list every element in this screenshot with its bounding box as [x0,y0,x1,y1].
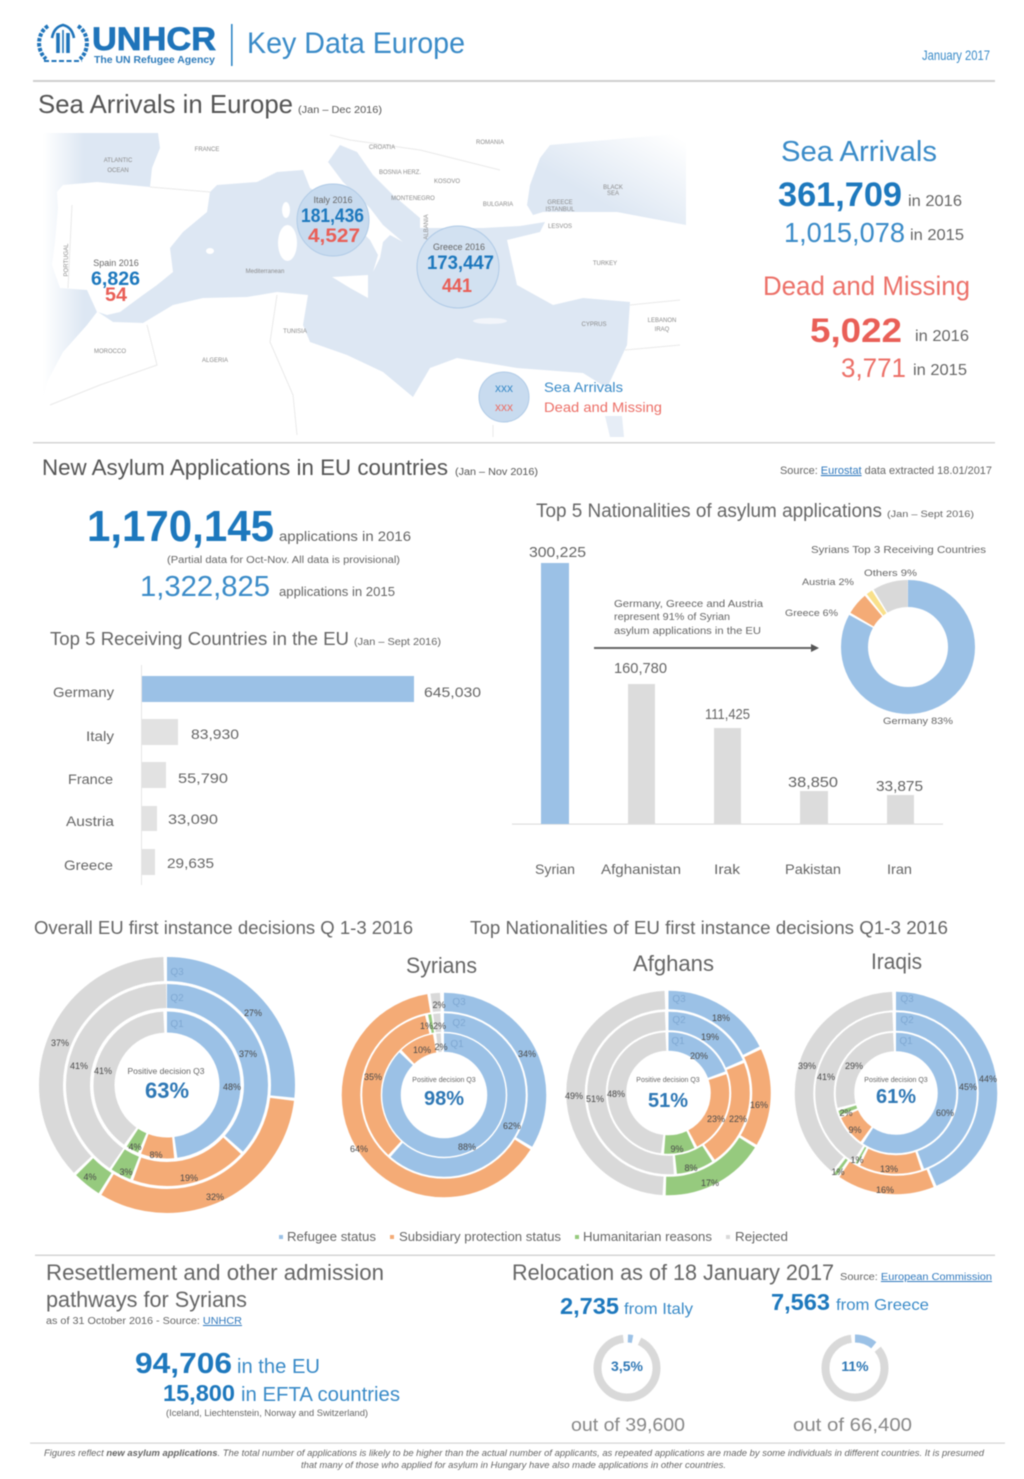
ring labels: 32% [206,1192,224,1202]
ring labels: Q3 [900,994,914,1005]
Italy and islands [206,162,507,324]
map place labels: LEBANON [648,318,676,324]
annotation: Germany, Greece and Austria: asylum applications in the EU [614,626,761,637]
ring labels: Q2 [672,1015,686,1026]
ring labels: 60% [936,1108,954,1118]
donut: Syrians top 3 receiving countries: Others 9% [864,568,918,579]
source: UNHCR: as of 31 October 2016 - Source: UNHCR [46,1316,242,1327]
ring labels: Q3 [170,967,184,978]
figure: Greece: from Greece [836,1297,929,1314]
centre value: Positive decision Q3 [864,1077,928,1084]
bars [142,676,414,875]
header logo: UNHCR [39,21,216,66]
figure: Greece: 7,563 [771,1289,830,1315]
figure: Italy: from Italy [624,1301,693,1318]
ring labels: 3% [119,1167,133,1177]
map place labels: Mediterranean [246,269,284,275]
donut: Greece relocation: 11% [841,1358,869,1374]
ring labels [798,994,997,1195]
applications totals: 1,322,825 [140,571,270,603]
arrivals 2016: in 2016 [908,193,962,210]
ring labels: 37% [239,1049,257,1059]
map base [43,133,686,437]
callout: Spain: 54 [105,285,127,306]
ring labels: 62% [503,1121,521,1131]
map place labels: BOSNIA HERZ. [379,170,421,176]
map place labels: CYPRUS [581,322,607,328]
legend: decision types: Subsidiary protection status [399,1229,561,1244]
ring labels: 45% [959,1082,977,1092]
map place labels: TURKEY [593,261,617,267]
values: 111,425 [705,706,750,723]
values: 83,930 [191,726,239,742]
ring labels: Q2 [900,1015,914,1026]
heading: Sea Arrivals in Europe: Sea Arrivals in Europe [38,89,293,119]
values: 160,780 [614,660,667,677]
values: 55,790 [178,770,228,786]
donut: Iraqis [798,994,997,1195]
ring labels: 18% [712,1013,730,1023]
ring labels: 37% [51,1038,69,1048]
donut: Syrians top 3 receiving countries: Germany 83% [883,716,954,727]
centre value: Positive decision Q3 [127,1066,205,1076]
ring labels: Q2 [170,993,184,1004]
dead 2016 [810,312,969,350]
ring labels: 13% [880,1164,898,1174]
legend: decision types [279,1229,788,1244]
ring labels: 41% [94,1066,112,1076]
map place labels: FRANCE [195,147,219,153]
ring labels [51,967,262,1202]
country labels: Italy [86,728,114,744]
ring labels: 88% [458,1142,476,1152]
nationality labels: Syrian [535,861,575,877]
map place labels: OCEAN [107,168,129,174]
ring labels: 17% [701,1178,719,1188]
ring labels: 9% [848,1125,862,1135]
donut: Afghans [565,994,768,1188]
map legend: xxx [495,381,513,395]
ring labels: 8% [149,1150,163,1160]
centre value: 98% [424,1088,464,1110]
heading: Overall EU first instance decisions: Overall EU first instance decisions Q 1-3 2016 [34,918,413,938]
applications totals: 1,170,145 [87,502,274,551]
callout: Spain: Spain 2016 [93,258,139,268]
donut: Greece relocation [826,1338,884,1398]
values: 33,090 [168,811,218,827]
map place labels: ALBANIA [424,214,430,240]
country labels: Greece [64,857,113,873]
arrivals 2016 [778,176,962,214]
donut: Italy relocation [598,1338,656,1398]
values [529,544,923,795]
ring labels [565,994,768,1188]
heading: Dead and Missing: Dead and Missing [763,271,970,301]
heading: Top 5 Receiving Countries: (Jan – Sept 2016) [354,637,441,648]
bars [541,563,914,824]
ring labels: 19% [701,1032,719,1042]
centre value: Positive decision Q3 [636,1077,700,1084]
ring labels: 8% [684,1163,698,1173]
ring labels [350,997,536,1154]
heading: Resettlement: Resettlement and other admission [46,1260,384,1285]
figure: Italy [560,1293,693,1319]
values: 29,635 [167,855,214,871]
callout: Greece: 173,447 [427,253,494,274]
heading: Top 5 Nationalities: (Jan – Sept 2016) [887,509,974,519]
heading: Iraqis: Iraqis [871,949,922,974]
bar chart: receiving countries [53,665,481,885]
ring labels: 35% [364,1072,382,1082]
map place labels: CROATIA [369,145,395,151]
ring labels: 4% [83,1172,97,1182]
figure: EU [135,1348,320,1380]
map place labels: KOSOVO [434,179,460,185]
nationality labels [535,861,912,877]
footnote: that many of those who applied for asylum in Hungary have also made applications in other countries. [301,1460,726,1471]
country labels: France [68,771,113,787]
annotation: Germany, Greece and Austria: represent 91% of Syrian [614,612,730,623]
country labels: Germany [53,684,114,700]
map legend: Sea Arrivals [544,379,623,395]
map place labels: PORTUGAL [64,243,70,276]
ring labels: 2% [434,1042,448,1052]
totals: out of 39,600 [571,1415,685,1435]
centre value [864,1077,928,1108]
country labels: Austria [66,813,114,829]
applications totals: applications in 2016 [279,528,411,544]
ring labels: Q3 [452,997,466,1008]
map legend [479,372,662,422]
values: 300,225 [529,544,586,561]
dead 2015: in 2015 [913,362,967,379]
heading: Afghans: Afghans [633,951,714,976]
ring labels: 1% [850,1155,864,1165]
ring labels: Q1 [899,1036,913,1047]
bar chart: nationalities [512,544,943,877]
figure: EFTA: in EFTA countries [241,1384,400,1406]
callout: Italy: Italy 2016 [313,195,353,205]
heading: Resettlement [46,1260,384,1312]
donut: Syrians [350,997,537,1188]
ring labels: Q1 [450,1039,464,1050]
heading: Top 5 Nationalities: Top 5 Nationalities of asylum applications [536,501,882,522]
map place labels [64,140,676,364]
ring labels: 22% [729,1114,747,1124]
ring labels: 20% [690,1051,708,1061]
values: 645,030 [424,684,481,700]
dead 2015: 3,771 [841,353,906,383]
ring labels: 44% [979,1074,997,1084]
nationality labels: Irak [714,861,741,877]
panel: relocation [512,1260,992,1435]
icon: UNHCR wreath and figures [39,25,87,61]
ring labels: 19% [180,1173,198,1183]
ring labels: 16% [750,1100,768,1110]
nationality labels: Iran [887,861,912,877]
dead 2016: in 2016 [915,328,969,345]
centre value: 63% [145,1078,189,1103]
map place labels: BULGARIA [483,202,513,208]
ring labels: 41% [70,1061,88,1071]
ring labels: 29% [845,1061,863,1071]
date: January 2017 [922,47,990,63]
title: Key Data Europe [247,27,465,60]
callout: Spain [91,258,140,306]
map legend: xxx [495,400,513,414]
arrivals 2015: 1,015,078 [784,217,905,248]
figure: EU: 94,706 [135,1348,232,1380]
heading: Relocation: Relocation as of 18 January 2017 [512,1260,834,1285]
map legend: Dead and Missing [544,399,662,415]
nationality labels: Pakistan [785,861,841,877]
centre value: Positive decision Q3 [412,1077,476,1084]
map place labels: MOROCCO [94,349,126,355]
heading: New Asylum Applications: (Jan – Nov 2016) [455,467,538,478]
panel: resettlement [46,1260,400,1418]
callout: Greece [417,226,499,308]
nationality labels: Afghanistan [601,861,681,877]
centre value [636,1077,700,1112]
map place labels: TUNISIA [283,329,307,335]
centre value: 51% [648,1090,688,1112]
legend: decision types: Humanitarian reasons [583,1229,712,1244]
centre value [127,1066,205,1103]
donut: Syrians top 3 receiving countries: Greece 6% [785,608,839,619]
map place labels: ISTANBUL [546,207,575,213]
values: 38,850 [788,774,838,791]
source: Eurostat: Source: Eurostat data extracted 18.01/2017 [780,465,992,477]
callout: Spain: 6,826 [91,269,140,290]
map place labels: IRAQ [655,327,670,333]
totals: out of 66,400 [793,1415,912,1435]
ring labels: Q1 [170,1019,184,1030]
ring labels: 64% [350,1144,368,1154]
dead 2016: 5,022 [810,312,902,350]
applications totals [87,502,411,603]
country labels [53,684,114,873]
ring labels: 1% [831,1167,845,1177]
callout: Greece: Greece 2016 [433,242,485,252]
map place labels: ROMANIA [476,140,504,146]
ring labels: 9% [670,1144,684,1154]
centre value: 61% [876,1086,916,1108]
map place labels: MONTENEGRO [391,196,435,202]
arrivals 2015 [784,217,964,248]
applications totals: applications in 2015 [279,584,395,599]
ring labels: 27% [244,1008,262,1018]
logo wordmark: UNHCR [92,21,216,57]
totals [571,1415,912,1435]
heading: New Asylum Applications: New Asylum Applications in EU countries [42,455,448,480]
ring labels: 2% [432,1000,446,1010]
heading: Sea Arrivals in Europe: (Jan – Dec 2016) [298,105,382,116]
logo tagline: The UN Refugee Agency [94,55,215,66]
map place labels: ATLANTIC [104,158,133,164]
ring labels: 10% [413,1045,431,1055]
ring labels: 48% [223,1082,241,1092]
map place labels: GREECE [547,200,573,206]
figure: Greece [771,1289,929,1315]
ring labels: 23% [707,1114,725,1124]
map place labels: LESVOS [548,224,572,230]
heading: Sea Arrivals: Sea Arrivals [781,136,937,168]
ring labels: 49% [565,1091,583,1101]
panel: sea arrivals totals [763,136,970,383]
figure: EFTA: 15,800 [163,1380,235,1406]
arrivals 2015: in 2015 [910,227,964,244]
values: 33,875 [876,778,923,795]
heading: Resettlement: pathways for Syrians [46,1287,247,1312]
ring labels: 16% [876,1185,894,1195]
ring labels: 48% [607,1089,625,1099]
heading: Top Nationalities decisions: Top Nationalities of EU first instance decisions Q1-3 2016 [470,918,948,938]
footnote [44,1448,985,1471]
callout: Italy: 4,527 [308,226,360,247]
donut: overall EU [51,967,283,1202]
ring labels: 51% [586,1094,604,1104]
ring labels: Q3 [672,994,686,1005]
applications totals: (Partial data for Oct-Nov. All data is provisional) [167,555,400,566]
EFTA note: (Iceland, Liechtenstein, Norway and Switzerland) [166,1408,368,1418]
values [167,684,481,871]
donut: Syrians top 3 receiving countries: Syrians Top 3 Receiving Countries [811,545,986,556]
map place labels: ALGERIA [202,358,228,364]
donut: Syrians top 3 receiving countries [785,545,986,727]
ring labels: 39% [798,1061,816,1071]
source: European Commission: Source: European Commission [840,1272,992,1283]
footnote: Figures reflect new asylum applications. The total number of applications is likely to be higher than the actual number of applicants, as repeated applications are made by some individuals in different countries. It is presumed [44,1448,985,1459]
donut: Syrians top 3 receiving countries: Austria 2% [802,577,855,588]
donut: Italy relocation: 3,5% [611,1358,644,1374]
figure: Italy: 2,735 [560,1293,619,1319]
centre value [412,1077,476,1110]
arrow [594,644,819,652]
map place labels: BLACK [603,185,623,191]
ring labels: 41% [817,1072,835,1082]
ring labels: Q1 [671,1036,685,1047]
ring labels: Q2 [452,1018,466,1029]
legend: decision types: Rejected [735,1229,788,1244]
figure: EFTA [163,1380,400,1406]
ring labels: 1%2% [420,1021,446,1031]
callout: Italy: 181,436 [301,206,364,227]
figure: EU: in the EU [237,1356,320,1378]
ring labels: 2% [839,1108,853,1118]
dead 2015 [841,353,967,383]
map place labels: SEA [607,191,619,197]
ring labels: 4% [128,1142,142,1152]
heading: Top 5 Receiving Countries: Top 5 Receiving Countries in the EU [50,629,349,649]
annotation: Germany, Greece and Austria: Germany, Greece and Austria [614,599,763,610]
callout: Greece: 441 [442,276,472,297]
heading: Syrians: Syrians [406,953,477,978]
ring labels: 34% [518,1049,536,1059]
arrivals 2016: 361,709 [778,176,902,214]
legend: decision types: Refugee status [287,1229,377,1244]
annotation: Germany, Greece and Austria [614,599,763,637]
panel: Mediterranean map [43,133,686,437]
callout: Italy [297,184,369,256]
